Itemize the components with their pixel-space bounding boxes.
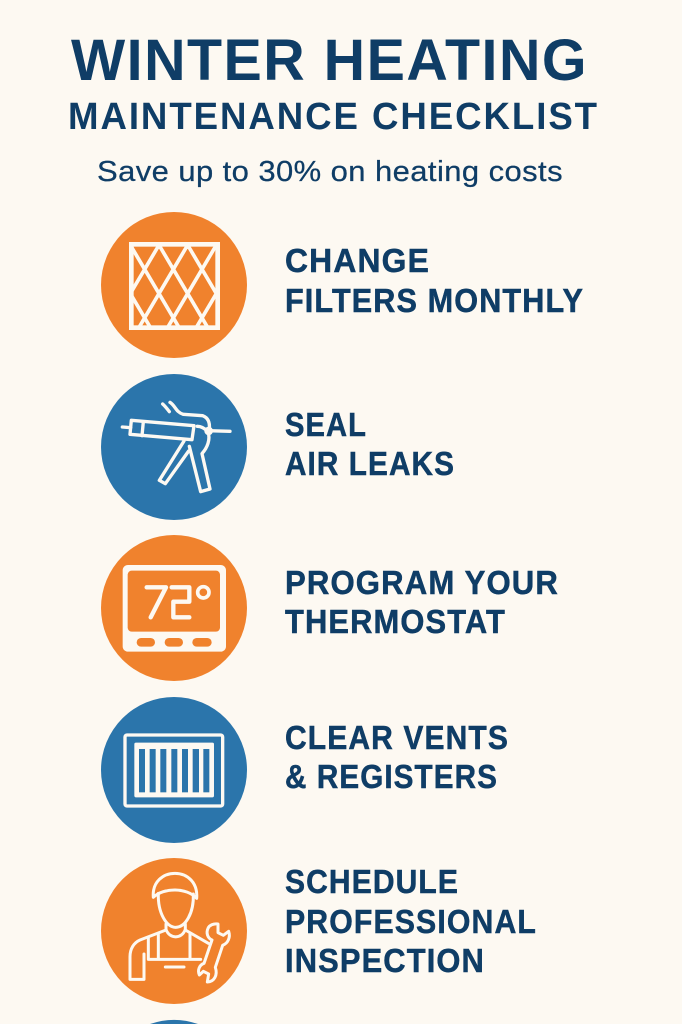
next item circle, cropped by page edge	[150, 1020, 198, 1024]
label: FILTERS MONTHLY	[285, 282, 584, 319]
label: CLEAR VENTS	[285, 719, 509, 756]
item: seal air leaks	[101, 374, 455, 520]
subtitle: Save up to 30% on heating costs	[97, 156, 563, 188]
label: & REGISTERS	[285, 758, 498, 795]
label: CHANGE	[285, 242, 430, 279]
icon: thermostat 72 degrees	[101, 535, 247, 681]
label: INSPECTION	[285, 942, 485, 979]
label: SCHEDULE	[285, 863, 459, 900]
label: PROGRAM YOUR	[285, 564, 559, 601]
label: AIR LEAKS	[285, 445, 455, 482]
icon: technician with wrench	[101, 858, 247, 1004]
label: PROFESSIONAL	[285, 903, 537, 940]
label: THERMOSTAT	[285, 603, 506, 640]
icon: vent register	[101, 697, 247, 843]
title line 2: MAINTENANCE CHECKLIST	[68, 96, 599, 138]
item: professional inspection	[101, 858, 537, 1004]
item: program thermostat	[101, 535, 559, 681]
item: change filters	[73, 212, 584, 358]
label: SEAL	[285, 406, 367, 443]
icon: caulking gun	[101, 374, 247, 520]
item: clear vents	[101, 697, 509, 843]
title line 1: WINTER HEATING	[71, 28, 588, 93]
header	[68, 28, 599, 188]
icon: air filter	[101, 212, 247, 358]
